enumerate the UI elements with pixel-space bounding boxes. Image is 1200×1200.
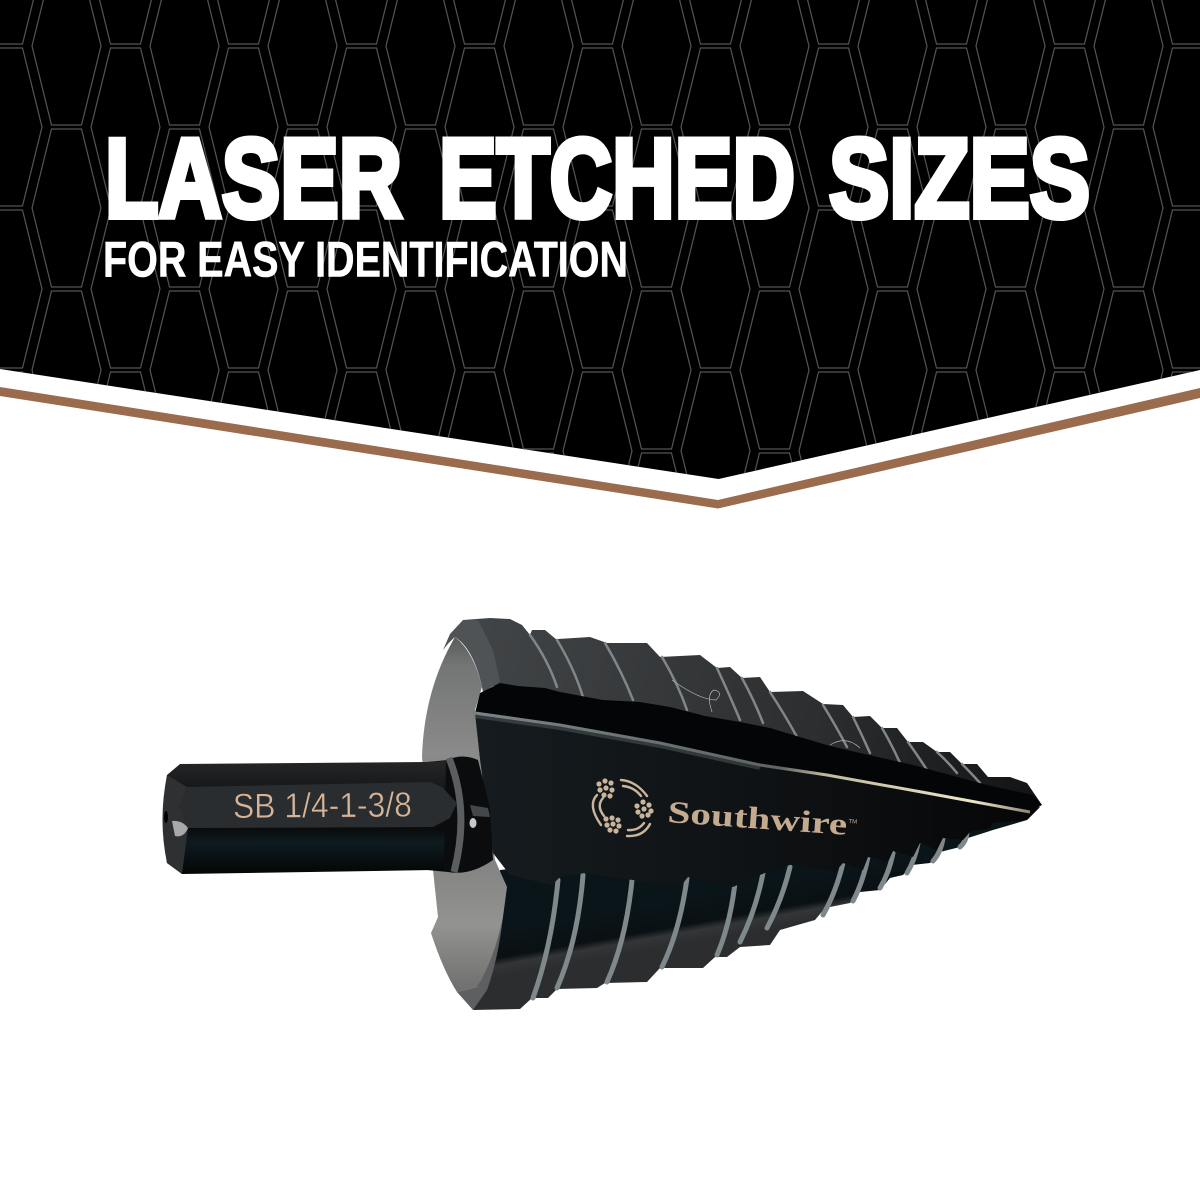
Southwire etched wordmark: TM: [848, 819, 857, 826]
flute shadow band: [475, 683, 1042, 812]
Southwire etched wordmark: Southwire: [666, 794, 849, 842]
header banner with hexagon pattern: [0, 0, 1200, 479]
Southwire logo mark: [593, 778, 654, 836]
hex flat with laser etched size: [180, 782, 457, 828]
rear face of the bit: [422, 637, 507, 992]
collar between shank and body: [427, 756, 493, 873]
copper chevron stripe: [0, 387, 1200, 508]
subtitle: FOR EASY IDENTIFICATION: [103, 232, 628, 288]
shank end cap: [162, 775, 188, 874]
rim: top chamfer: [443, 620, 500, 692]
hex shank: [164, 761, 446, 874]
cutting edge highlight: [475, 713, 1030, 812]
title: LASER: [105, 116, 402, 241]
upper stepped flank: [463, 618, 1042, 805]
rim: bottom chamfer: [457, 917, 503, 1010]
title: [105, 116, 1090, 241]
title: ETCHED: [439, 116, 795, 241]
Southwire etched wordmark: [666, 794, 858, 843]
step drill bit product illustration: [162, 618, 1042, 1010]
lower stepped flank: [473, 807, 1040, 1010]
hex flat with laser etched size: SB 1/4-1-3/8: [233, 785, 412, 826]
title: SIZES: [829, 116, 1090, 241]
flute face: [475, 713, 1040, 887]
